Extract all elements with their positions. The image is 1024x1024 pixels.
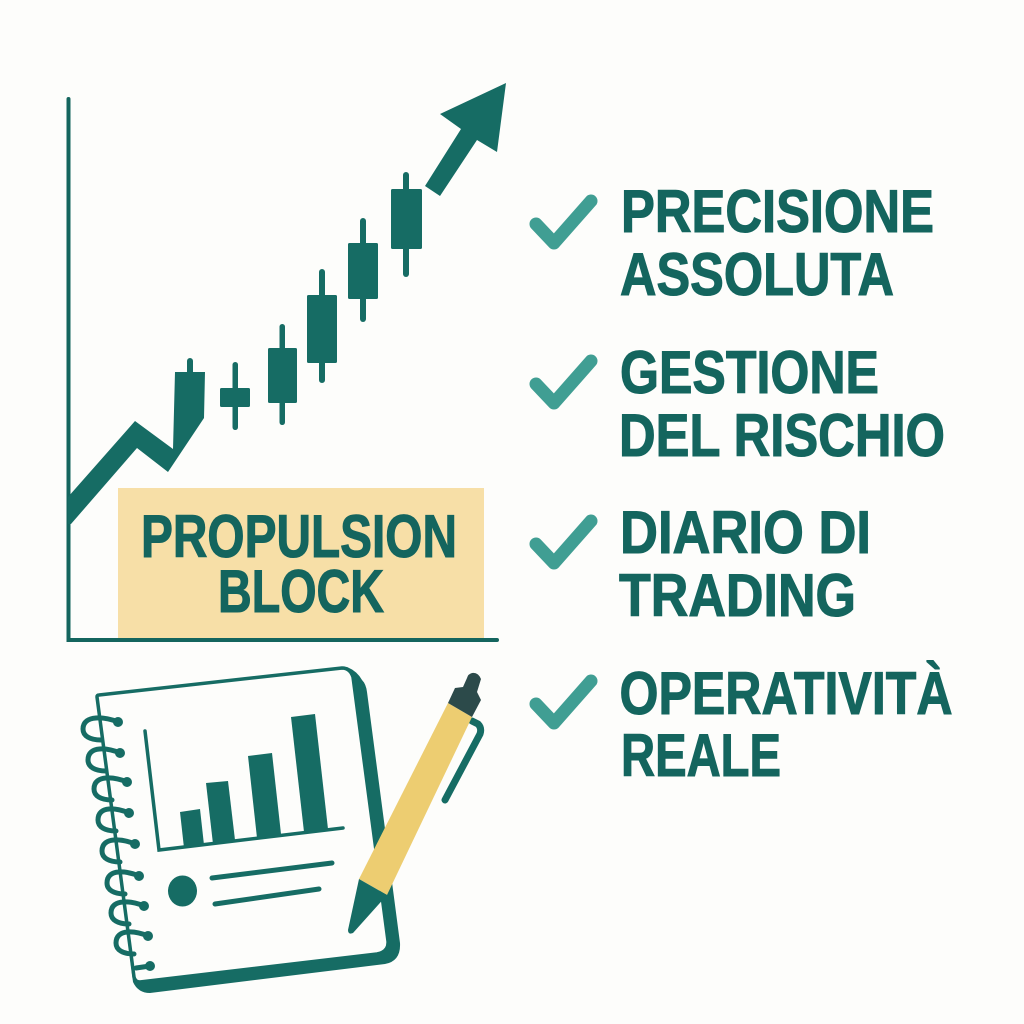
candle 5 bbox=[348, 218, 378, 322]
item: precisione assoluta: ASSOLUTA bbox=[620, 241, 894, 308]
rising arrow bbox=[425, 83, 506, 196]
item: gestione del rischio: GESTIONE bbox=[620, 339, 879, 406]
item: gestione del rischio bbox=[536, 339, 945, 469]
panel: candlestick chart bbox=[68, 83, 506, 640]
chart axes bbox=[68, 99, 497, 640]
item: operatività reale: REALE bbox=[621, 722, 781, 789]
item: diario di trading bbox=[536, 499, 871, 629]
propulsion block label box: BLOCK bbox=[218, 558, 384, 625]
bullet and text lines bbox=[168, 863, 332, 906]
zigzag line into first candle bbox=[68, 358, 205, 524]
notebook cover bbox=[97, 667, 400, 993]
pen bbox=[348, 673, 481, 934]
panel: checklist bbox=[536, 178, 952, 789]
propulsion block label box: PROPULSION bbox=[141, 503, 457, 570]
item: gestione del rischio: DEL RISCHIO bbox=[619, 402, 945, 469]
panel: notebook with bar chart bbox=[83, 667, 481, 993]
candle 2 bbox=[220, 362, 250, 430]
candle 4 bbox=[307, 269, 337, 383]
item: diario di trading: TRADING bbox=[619, 562, 856, 629]
item: operatività reale: OPERATIVITÀ bbox=[620, 660, 952, 727]
candle 6 bbox=[391, 172, 422, 277]
mini bar chart bbox=[145, 714, 343, 850]
candle 3 bbox=[268, 324, 297, 425]
item: diario di trading: DIARIO DI bbox=[620, 499, 871, 566]
propulsion block label box bbox=[118, 488, 484, 638]
item: precisione assoluta: PRECISIONE bbox=[621, 178, 934, 245]
notebook page bbox=[97, 668, 388, 982]
item: operatività reale bbox=[536, 660, 952, 789]
item: precisione assoluta bbox=[536, 178, 934, 308]
spiral binding bbox=[83, 717, 155, 971]
